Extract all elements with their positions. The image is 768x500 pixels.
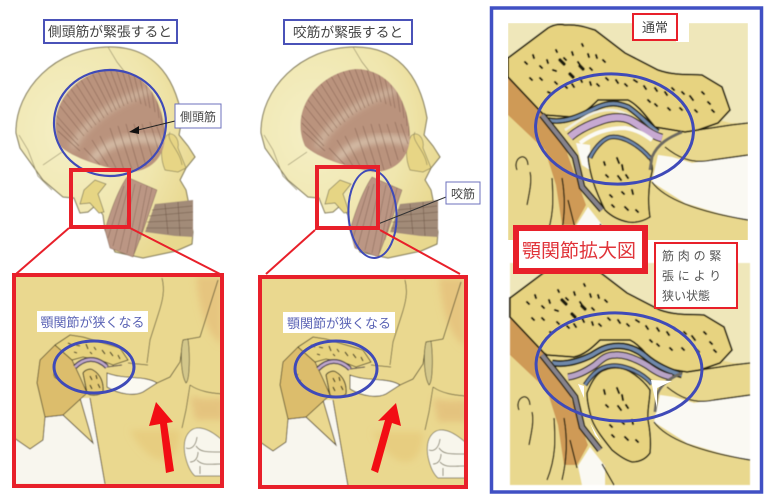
panel: narrowed joint under temporalis (12, 274, 224, 488)
title: enlarged joint (516, 228, 645, 271)
callout: narrowed by muscle tension (655, 243, 737, 308)
label: joint narrows 2: 顎関節が狭くなる (287, 316, 391, 331)
title: enlarged joint: 顎関節拡大図 (522, 240, 636, 262)
callout: narrowed by muscle tension: 張により (662, 269, 725, 283)
heading: masseter (284, 20, 412, 44)
panel: narrowed joint under masseter (255, 276, 467, 490)
label: normal: 通常 (642, 20, 668, 35)
callout: narrowed by muscle tension: 狭い状態 (662, 289, 710, 303)
zoom connector lines 1 (16, 228, 220, 274)
label: masseter with leader (378, 182, 480, 224)
panel: enlarged joint view (492, 8, 762, 492)
white notch behind normal label (676, 23, 689, 42)
joint illustration: narrowed (510, 263, 750, 485)
highlight ellipse: masseter (346, 169, 399, 259)
joint illustration: normal (508, 23, 748, 245)
white gaps: narrowed joint (578, 380, 672, 442)
joint highlight ellipse 1 (54, 341, 134, 393)
arrow: upward force 1 (149, 402, 174, 473)
highlight circle: temporalis (54, 70, 166, 176)
red selection square 1 (71, 170, 129, 227)
label: joint narrows 1: 顎関節が狭くなる (40, 315, 145, 330)
skull illustration: masseter (261, 47, 440, 258)
callout: narrowed by muscle tension: 筋肉の緊 (662, 248, 725, 263)
label: masseter with leader: 咬筋 (451, 186, 475, 201)
highlight ellipse: narrowed (533, 309, 705, 425)
label: joint narrows 1 (37, 311, 148, 332)
heading: temporalis: 側頭筋が緊張すると (48, 24, 172, 40)
highlight ellipse: normal (533, 70, 696, 188)
label: temporalis with arrow (129, 104, 221, 134)
heading: masseter: 咬筋が緊張すると (293, 24, 403, 40)
zoom connector lines 2 (266, 230, 460, 274)
heading: temporalis (44, 20, 177, 43)
joint highlight ellipse 2 (295, 341, 377, 397)
arrow: upward force 2 (371, 403, 401, 473)
label: joint narrows 2 (283, 312, 395, 333)
skull illustration: temporalis (16, 47, 195, 258)
red selection square 2 (317, 167, 378, 228)
label: temporalis with arrow: 側頭筋 (180, 109, 216, 124)
label: normal (633, 14, 677, 40)
